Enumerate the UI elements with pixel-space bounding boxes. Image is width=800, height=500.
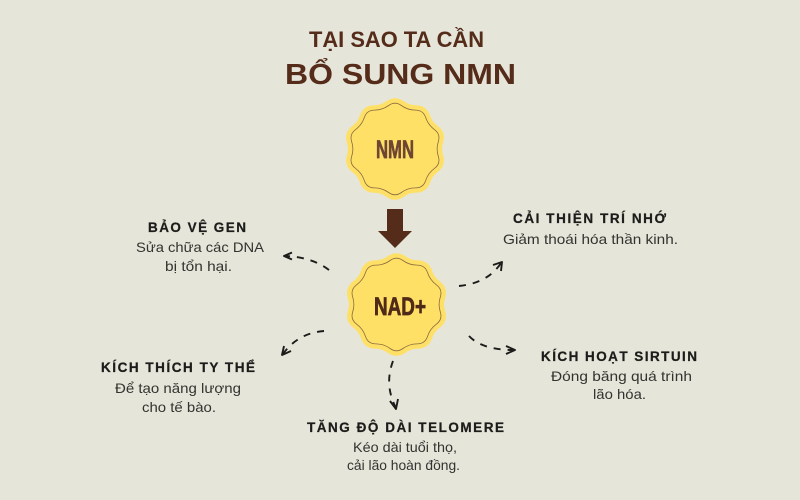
text block: Bảo vệ gen (136, 220, 265, 274)
badge: NMN: NMN (376, 136, 414, 164)
badge: NMN (351, 103, 439, 195)
text block: Kích thích ty thể: cho tế bào. (142, 399, 216, 415)
title: TẠI SAO TA CẦN (309, 27, 484, 52)
text block: Kích thích ty thể (101, 360, 255, 415)
badge: NAD+ (352, 258, 441, 351)
text block: Bảo vệ gen: BẢO VỆ GEN (148, 220, 246, 235)
badge: NAD+: NAD+ (374, 293, 426, 321)
text block: Tăng độ dài telomere: Kéo dài tuổi thọ, (353, 439, 457, 455)
title (285, 27, 516, 91)
text block: Cải thiện trí nhớ: Giảm thoái hóa thần kinh. (503, 231, 678, 247)
text block: Bảo vệ gen: bị tổn hại. (165, 258, 232, 274)
arrow: to Tăng độ dài telomere (389, 361, 398, 409)
arrow: to Cải thiện trí nhớ (459, 262, 502, 286)
arrow: to Kích hoạt Sirtuin (469, 336, 515, 354)
text block: Kích thích ty thể: KÍCH THÍCH TY THỂ (101, 360, 255, 375)
text block: Cải thiện trí nhớ (503, 211, 678, 247)
text block: Bảo vệ gen: Sửa chữa các DNA (136, 239, 265, 255)
title: BỔ SUNG NMN (285, 57, 516, 91)
arrow: NMN to NAD+ (378, 209, 412, 248)
arrow: to Bảo vệ gen (284, 252, 329, 270)
text block: Cải thiện trí nhớ: CẢI THIỆN TRÍ NHỚ (513, 211, 666, 226)
text block: Kích thích ty thể: Để tạo năng lượng (115, 380, 241, 396)
text block: Kích hoạt Sirtuin: lão hóa. (593, 386, 646, 402)
text block: Tăng độ dài telomere (307, 420, 504, 473)
text block: Tăng độ dài telomere: cải lão hoàn đồng. (347, 457, 460, 473)
arrow: to Kích thích ty thể (282, 331, 324, 355)
text block: Tăng độ dài telomere: TĂNG ĐỘ DÀI TELOMERE (307, 420, 504, 435)
text block: Kích hoạt Sirtuin: Đóng băng quá trình (551, 368, 692, 384)
text block: Kích hoạt Sirtuin: KÍCH HOẠT SIRTUIN (541, 349, 697, 364)
text block: Kích hoạt Sirtuin (541, 349, 697, 402)
